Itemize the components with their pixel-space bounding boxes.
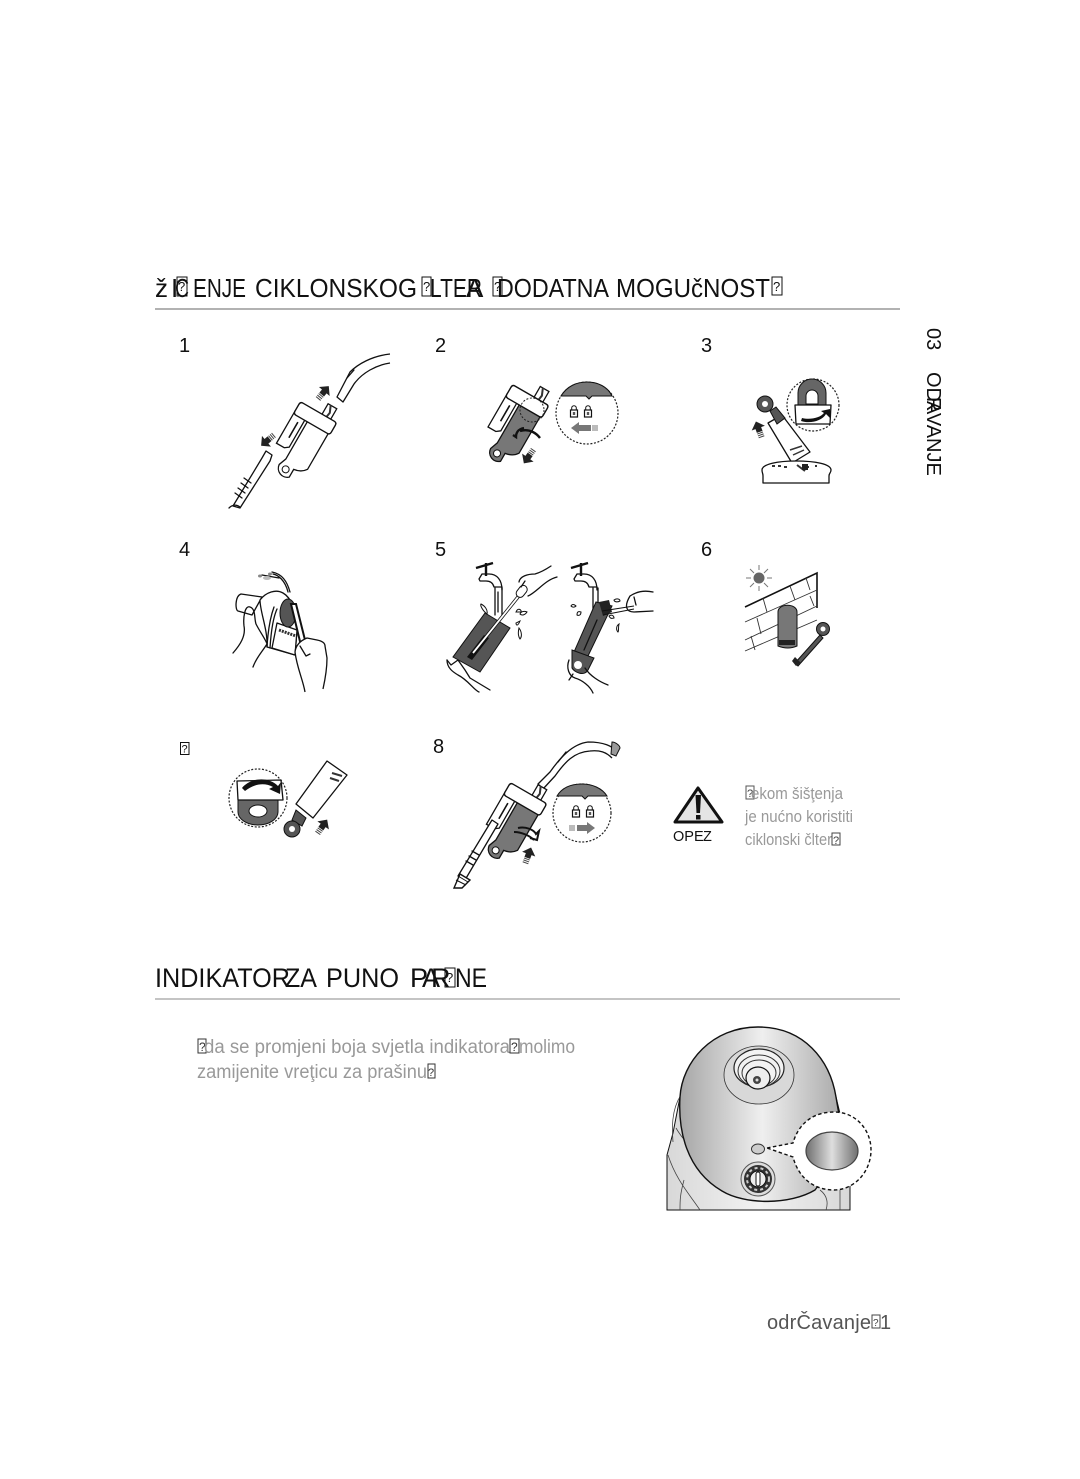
body text: indicator instruction: ? xyxy=(511,1040,518,1054)
body text: indicator instruction: ? xyxy=(428,1067,434,1079)
step number 6: 6 xyxy=(701,539,712,561)
heading: dust full indicator xyxy=(155,963,487,993)
warning label xyxy=(673,829,712,845)
illustration: step 8 reattach filter to hose and wand xyxy=(454,742,620,888)
illustration: step 4 tap filter to remove dust xyxy=(233,572,327,692)
step number 5: 5 xyxy=(435,539,446,561)
heading: cyclone filter cleaning: ? xyxy=(773,279,780,294)
illustration: step 3 empty container xyxy=(749,379,839,483)
heading: dust full indicator: PUNO xyxy=(326,963,399,993)
heading: cyclone filter cleaning: MOGUčNOST xyxy=(616,273,770,303)
side label: chapter 03 maintenance: AVANJE xyxy=(922,401,944,476)
heading: cyclone filter cleaning: ? xyxy=(178,279,185,294)
step number 8: 8 xyxy=(433,736,444,758)
warning label: Z xyxy=(703,829,712,845)
warning label: OP xyxy=(673,829,694,845)
step number 4: 4 xyxy=(179,539,190,561)
body text: indicator instruction: ? xyxy=(199,1040,206,1054)
illustration: step 5 wash container with brush xyxy=(447,563,653,693)
heading: cyclone filter cleaning xyxy=(155,273,782,303)
heading: cyclone filter cleaning: DODATNA xyxy=(497,273,610,303)
heading: dust full indicator: ZA xyxy=(285,963,317,993)
step number 7 as missing glyph: ? xyxy=(182,744,188,756)
heading: dust full indicator: NE xyxy=(455,963,487,993)
illustration: step 6 dry in the shade xyxy=(745,565,830,666)
step number 2: 2 xyxy=(435,335,446,357)
footer: page label: 1 xyxy=(880,1312,891,1334)
step number 1: 1 xyxy=(179,335,190,357)
footer: page label: ? xyxy=(873,1318,879,1329)
heading: dust full indicator: A xyxy=(422,963,440,993)
caution text: je nućno koristiti xyxy=(744,808,853,826)
icon: warning triangle xyxy=(675,788,722,822)
body text: indicator instruction: zamijenite vreţicu za prašinu xyxy=(197,1062,427,1083)
step number 3: 3 xyxy=(701,335,712,357)
footer: page label: odrČavanje xyxy=(767,1311,871,1334)
body text: indicator instruction xyxy=(197,1037,575,1083)
side label: chapter 03 maintenance: 03 xyxy=(922,328,944,350)
body text: indicator instruction: da se promjeni boja svjetla indikatora xyxy=(204,1037,510,1058)
heading: cyclone filter cleaning: A xyxy=(466,273,484,303)
caution text xyxy=(744,785,853,849)
caution text: ciklonski člter xyxy=(745,831,832,849)
heading: dust full indicator: P xyxy=(410,963,428,993)
heading: cyclone filter cleaning: C xyxy=(175,273,189,303)
heading: dust full indicator: INDIKATOR xyxy=(155,963,290,993)
step number 7 as missing glyph xyxy=(180,742,189,756)
illustration: step 1 detach filter from hose and wand xyxy=(229,354,390,508)
heading: dust full indicator: ? xyxy=(446,970,453,985)
heading: dust full indicator: R xyxy=(431,963,450,993)
illustration: step 2 unlock dust container xyxy=(475,374,618,470)
heading: cyclone filter cleaning: I xyxy=(171,273,178,303)
heading: cyclone filter cleaning: ž xyxy=(155,273,168,303)
illustration: step 7 reattach cover xyxy=(229,761,347,837)
heading: cyclone filter cleaning: CIKLONSKOG xyxy=(255,273,417,303)
caution text: ekom šišţenja xyxy=(751,785,844,803)
warning label: E xyxy=(694,829,704,845)
side label: chapter 03 maintenance xyxy=(922,328,944,476)
heading: cyclone filter cleaning: ? xyxy=(494,279,501,294)
heading: cyclone filter cleaning: ? xyxy=(423,279,430,294)
side label: chapter 03 maintenance: R xyxy=(922,397,944,411)
heading: cyclone filter cleaning: ENJE xyxy=(193,273,246,303)
side label: chapter 03 maintenance: OD xyxy=(922,372,944,402)
heading: cyclone filter cleaning: LTER xyxy=(430,273,482,303)
caution text: ? xyxy=(833,835,839,847)
caution text: ? xyxy=(747,788,753,800)
body text: indicator instruction: molimo xyxy=(519,1037,575,1058)
illustration: vacuum cleaner top with indicator lens xyxy=(667,1027,871,1210)
